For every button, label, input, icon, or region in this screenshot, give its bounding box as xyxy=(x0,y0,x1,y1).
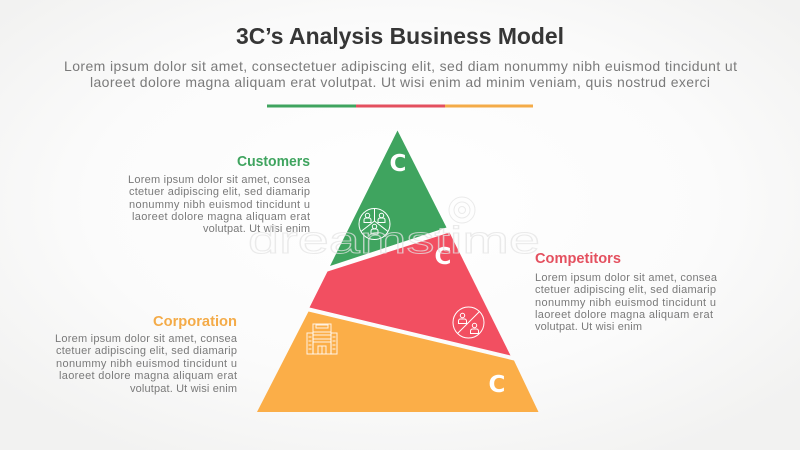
text block: competitors: nonummy nibh euismod tincidunt u xyxy=(535,297,716,309)
heading: customers: Customers xyxy=(237,154,310,170)
panel: corporation xyxy=(55,314,238,395)
icon: corporation building xyxy=(307,324,337,354)
text block: corporation: volutpat. Ut wisi enim xyxy=(130,383,237,395)
text block: corporation: ctetuer adipiscing elit, sed diamarip xyxy=(56,345,237,357)
watermark xyxy=(248,197,540,262)
text block: competitors: Lorem ipsum dolor sit amet, consea xyxy=(535,272,718,284)
text block: competitors xyxy=(535,272,718,333)
text block: customers: Lorem ipsum dolor sit amet, consea xyxy=(128,174,311,186)
text block: customers: ctetuer adipiscing elit, sed diamarip xyxy=(129,186,310,198)
pyramid xyxy=(257,130,538,412)
subtitle text: laoreet dolore magna aliquam erat volutpat. Ut wisi enim ad minim veniam, quis nostrud exerci xyxy=(90,74,710,90)
text block: customers: volutpat. Ut wisi enim xyxy=(203,223,310,235)
subtitle text: Lorem ipsum dolor sit amet, consectetuer adipiscing elit, sed diam nonummy nibh euismod tincidunt ut xyxy=(64,58,737,74)
text block: customers: nonummy nibh euismod tincidunt u xyxy=(129,199,310,211)
segment: competitors (red) xyxy=(310,232,510,356)
text block: competitors: laoreet dolore magna aliquam erat xyxy=(535,309,713,321)
panel: competitors xyxy=(535,251,718,333)
title: 3C’s Analysis Business Model xyxy=(236,23,564,49)
text block: customers: laoreet dolore magna aliquam erat xyxy=(132,211,310,223)
letter C on orange: C xyxy=(489,372,505,398)
text block: customers xyxy=(128,174,311,235)
icon: competitor prohibition xyxy=(453,307,484,338)
text block: competitors: volutpat. Ut wisi enim xyxy=(535,321,642,333)
heading: competitors: Competitors xyxy=(535,251,621,267)
letter C on red: C xyxy=(435,244,451,270)
letter C on green: C xyxy=(390,151,406,177)
text block: corporation: Lorem ipsum dolor sit amet, consea xyxy=(55,333,238,345)
panel: customers xyxy=(128,154,311,235)
tri-colour divider xyxy=(267,104,533,108)
text block: corporation xyxy=(55,333,238,395)
heading: corporation: Corporation xyxy=(153,314,237,330)
subtitle text xyxy=(64,58,737,90)
segment: customers (green) xyxy=(330,130,446,266)
text block: corporation: laoreet dolore magna aliquam erat xyxy=(59,370,237,382)
watermark: dreamstime xyxy=(248,220,540,262)
icon: customer segments xyxy=(359,208,390,240)
segment: corporation (orange) xyxy=(257,312,538,412)
text block: corporation: nonummy nibh euismod tincidunt u xyxy=(56,358,237,370)
text block: competitors: ctetuer adipiscing elit, sed diamarip xyxy=(535,284,716,296)
